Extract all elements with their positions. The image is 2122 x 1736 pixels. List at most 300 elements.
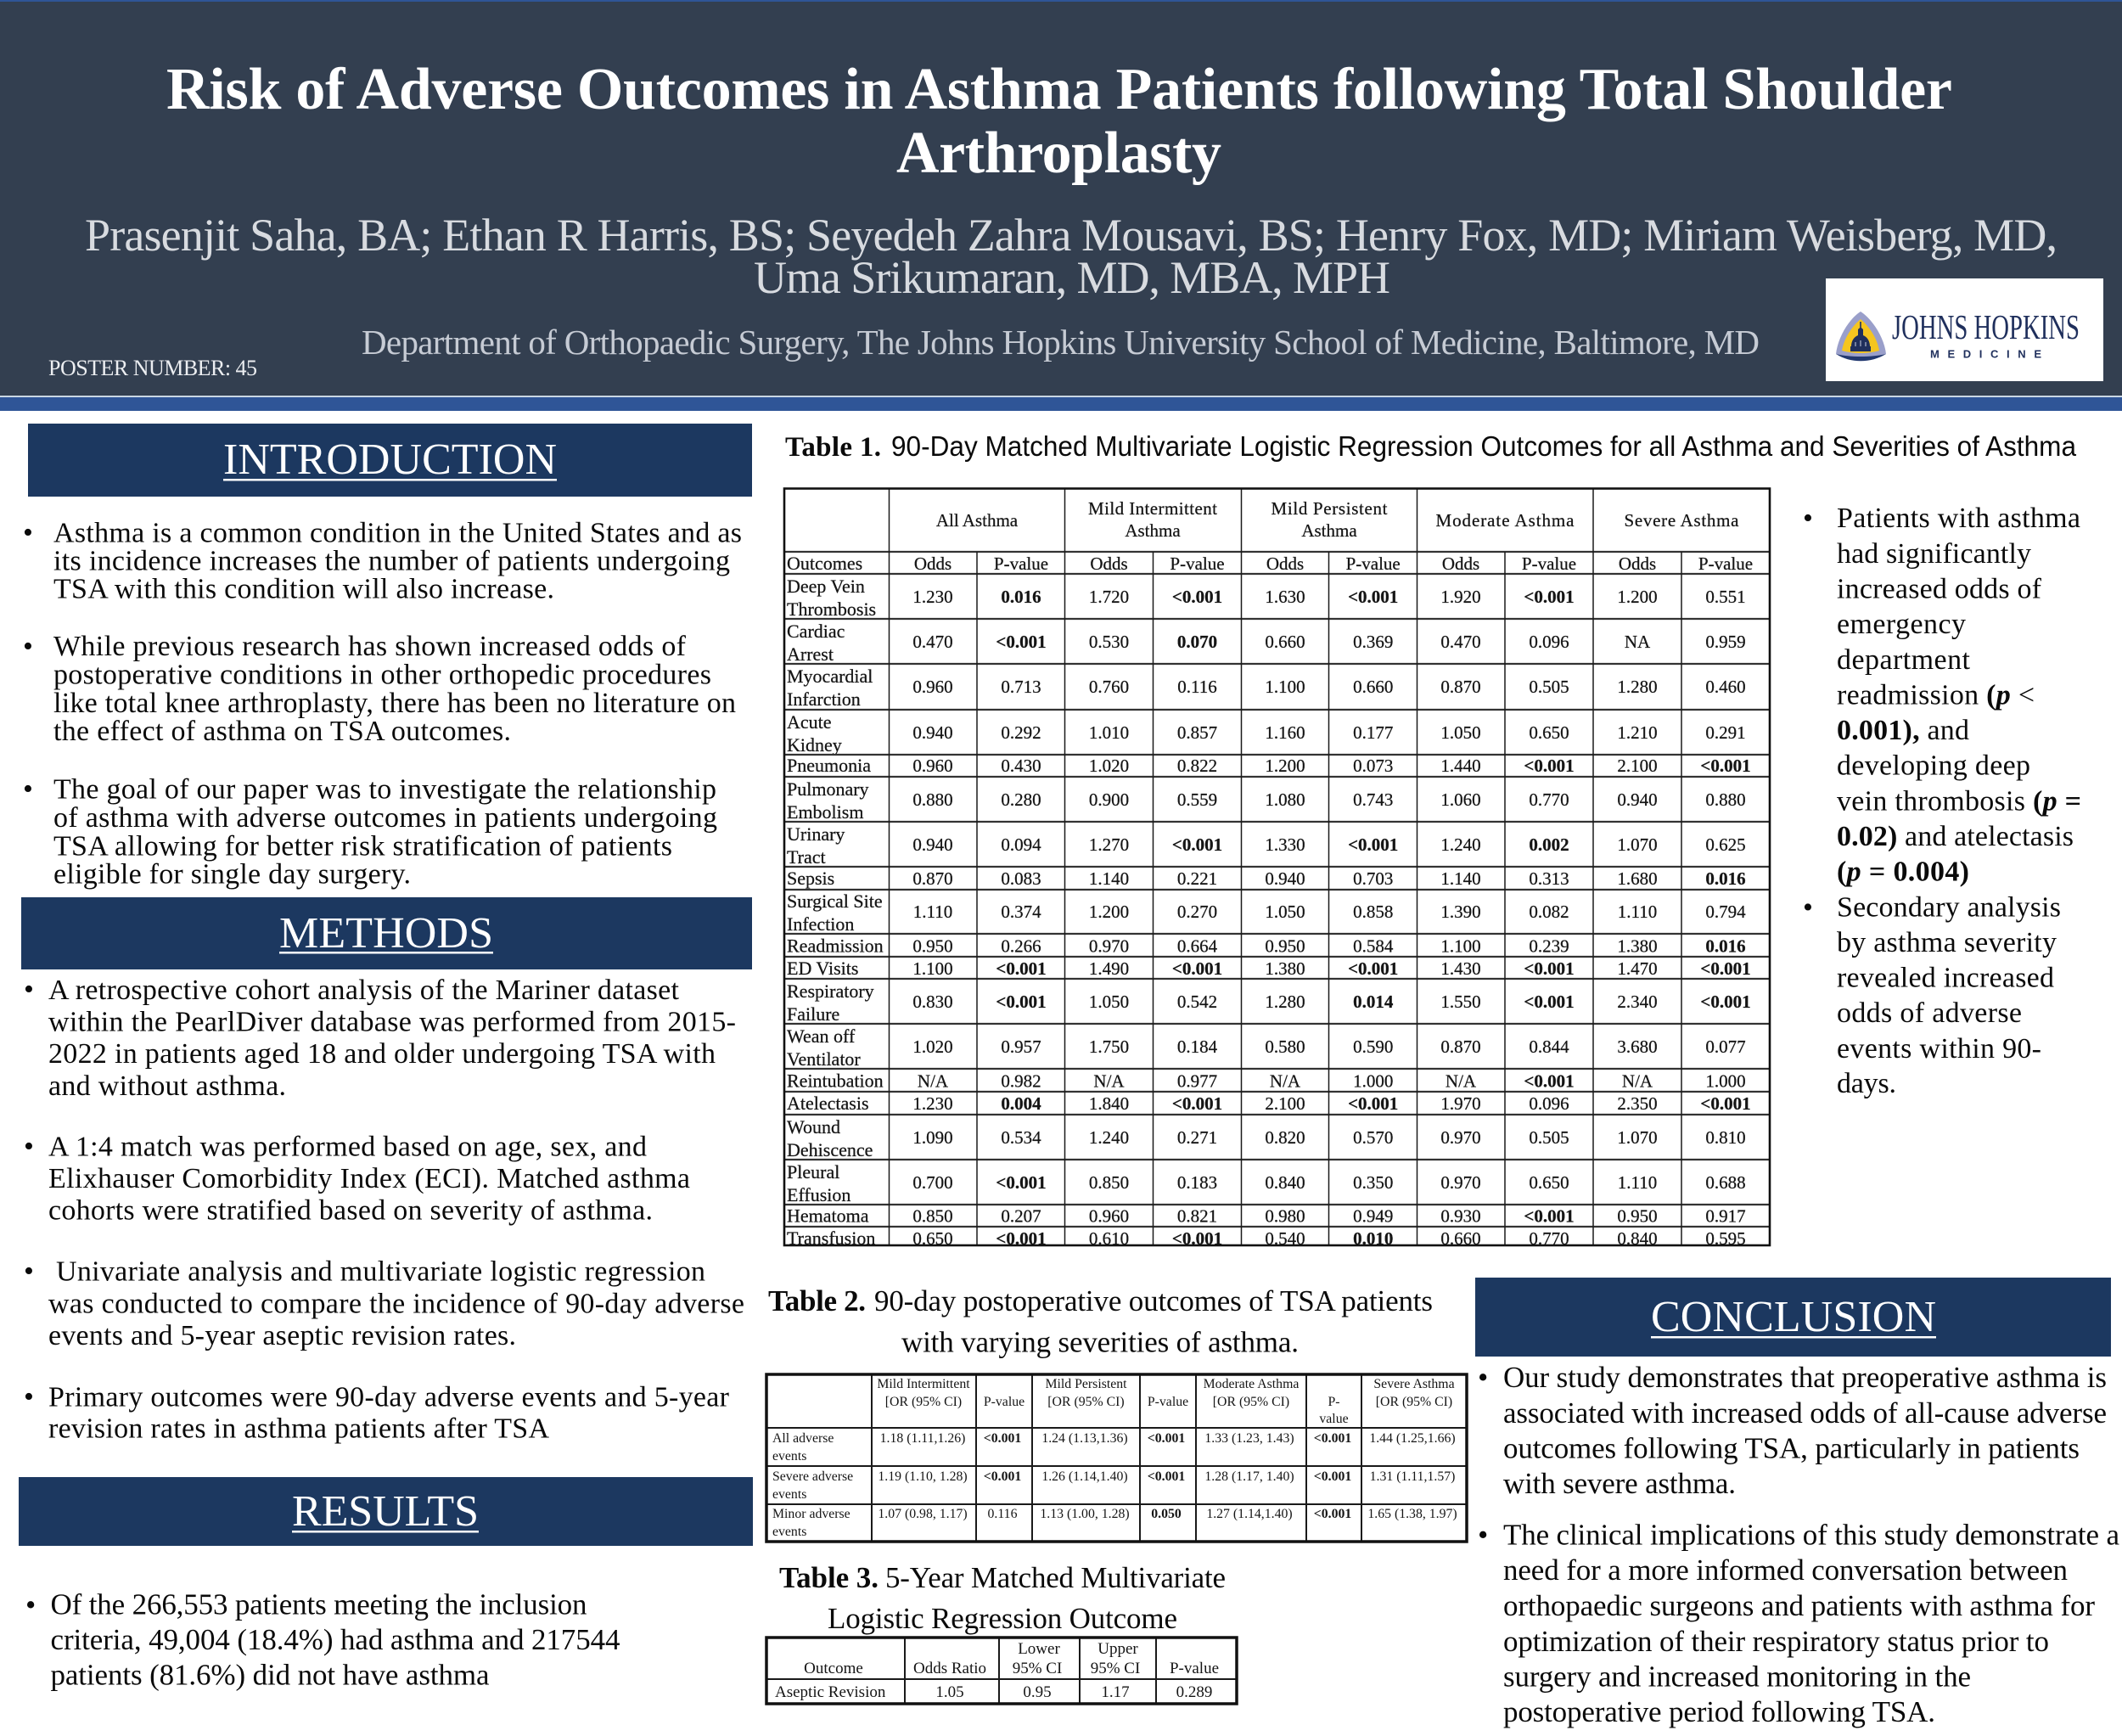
row: ed visits: <0.001 bbox=[1524, 958, 1575, 979]
row: wean off ventilator: 0.844 bbox=[1529, 1037, 1569, 1057]
text: introduction bullets: the effect of asthma on TSA outcomes. bbox=[53, 716, 511, 747]
authors: Prasenjit Saha, BA; Ethan R Harris, BS; Seyedeh Zahra Mousavi, BS; Henry Fox, MD; Miriam Weisberg, MD, bbox=[85, 210, 2057, 261]
table 3 header bbox=[804, 1640, 1219, 1677]
row: surgical site infection: 0.082 bbox=[1529, 902, 1569, 922]
row: minor adverse events: 1.27 (1.14,1.40) bbox=[1206, 1507, 1293, 1521]
row: acute kidney: 0.940 bbox=[912, 722, 953, 743]
table 2 header: P-value bbox=[1148, 1395, 1188, 1409]
panel: results bbox=[19, 1477, 753, 1691]
text: methods bullets: • bbox=[24, 1131, 34, 1162]
row: cardiac arrest: 0.959 bbox=[1705, 632, 1746, 652]
row: pleural effusion: 0.650 bbox=[1529, 1172, 1569, 1193]
row: wean off ventilator: 0.077 bbox=[1705, 1037, 1746, 1057]
row: urinary tract: 1.070 bbox=[1617, 834, 1658, 855]
row: readmission: 0.950 bbox=[1265, 935, 1305, 956]
row: wound dehiscence: 0.810 bbox=[1705, 1127, 1746, 1148]
table 1 header row: Severe Asthma bbox=[1625, 510, 1739, 531]
row: urinary tract: 0.094 bbox=[1001, 834, 1041, 855]
row: wound dehiscence: Dehiscence bbox=[787, 1139, 873, 1160]
row: urinary tract: 0.002 bbox=[1529, 834, 1569, 855]
poster number: POSTER NUMBER: 45 bbox=[48, 356, 257, 380]
row: sepsis: 0.083 bbox=[1001, 868, 1041, 889]
table 1 header row: Mild Intermittent bbox=[1088, 498, 1217, 519]
row: pulmonary embolism bbox=[787, 778, 1746, 823]
row: pleural effusion: 0.850 bbox=[1089, 1172, 1129, 1193]
table 1 header row: Mild Persistent bbox=[1272, 498, 1388, 519]
row: minor adverse events: events bbox=[772, 1525, 806, 1539]
table 1 sub-header row bbox=[787, 553, 1753, 574]
row: severe adverse events: 1.31 (1.11,1.57) bbox=[1370, 1469, 1455, 1484]
text: methods bullets bbox=[24, 974, 744, 1445]
row: wean off ventilator: 1.750 bbox=[1089, 1037, 1129, 1057]
row: hematoma: 0.850 bbox=[912, 1205, 953, 1226]
table 1 sub-header row: Odds bbox=[1090, 553, 1128, 574]
row: myocardial infarction: 0.505 bbox=[1529, 677, 1569, 697]
table 2 caption bbox=[768, 1284, 1433, 1358]
text: conclusion bullets: postoperative period following TSA. bbox=[1503, 1695, 1935, 1728]
text: table 1 findings: odds of adverse bbox=[1837, 997, 2022, 1029]
heading: methods: METHODS bbox=[279, 909, 493, 958]
row: wound dehiscence bbox=[787, 1116, 1746, 1160]
table 1 sub-header row: P-value bbox=[994, 553, 1048, 574]
row: readmission: 0.664 bbox=[1177, 935, 1218, 956]
row: myocardial infarction: 0.116 bbox=[1177, 677, 1217, 697]
row: pulmonary embolism: 0.880 bbox=[1705, 789, 1746, 810]
table 2 header: P-value bbox=[984, 1395, 1025, 1409]
row: myocardial infarction: 0.760 bbox=[1089, 677, 1129, 697]
row: hematoma: 0.980 bbox=[1265, 1205, 1305, 1226]
row: reintubation: N/A bbox=[1270, 1071, 1301, 1092]
row: ed visits: 1.490 bbox=[1089, 958, 1129, 979]
table 3 header: P-value bbox=[1170, 1660, 1219, 1677]
row: minor adverse events: 0.116 bbox=[988, 1507, 1018, 1521]
heading: conclusion bbox=[1475, 1278, 2111, 1357]
text: results bullet bbox=[25, 1588, 620, 1691]
text: introduction bullets: • bbox=[23, 631, 33, 662]
table 1 sub-header row: P-value bbox=[1170, 553, 1225, 574]
row: wound dehiscence: 0.534 bbox=[1001, 1127, 1041, 1148]
text: methods bullets: A 1:4 match was performed based on age, sex, and bbox=[48, 1131, 647, 1163]
row: acute kidney: 1.050 bbox=[1440, 722, 1481, 743]
text: introduction bullets: its incidence increases the number of patients undergoing bbox=[53, 545, 730, 577]
row: acute kidney: 0.291 bbox=[1705, 722, 1746, 743]
row: urinary tract: 0.940 bbox=[912, 834, 953, 855]
text: table 1 findings: emergency bbox=[1837, 609, 1966, 640]
row: readmission: 0.584 bbox=[1353, 935, 1394, 956]
row: pulmonary embolism: 0.900 bbox=[1089, 789, 1129, 810]
text: table 1 findings: • bbox=[1803, 503, 1813, 534]
row: pleural effusion: 0.700 bbox=[912, 1172, 953, 1193]
row: minor adverse events: 1.13 (1.00, 1.28) bbox=[1040, 1507, 1130, 1521]
row: cardiac arrest: 0.369 bbox=[1353, 632, 1393, 652]
table 1 sub-header row: Outcomes bbox=[787, 553, 862, 574]
row: readmission: 0.970 bbox=[1089, 935, 1129, 956]
row: all adverse events: 1.44 (1.25,1.66) bbox=[1369, 1431, 1456, 1446]
row: surgical site infection: Infection bbox=[787, 913, 854, 935]
row: pulmonary embolism: 1.080 bbox=[1265, 789, 1305, 810]
row: pleural effusion: 0.183 bbox=[1177, 1172, 1217, 1193]
text: table 1 findings: Secondary analysis bbox=[1837, 892, 2061, 924]
heading: methods bbox=[21, 897, 752, 969]
row: transfusion: <0.001 bbox=[1172, 1228, 1222, 1249]
row: ed visits: <0.001 bbox=[996, 958, 1047, 979]
row: reintubation: N/A bbox=[1446, 1071, 1477, 1092]
text: methods bullets: • bbox=[24, 974, 34, 1005]
row: pulmonary embolism: 0.880 bbox=[912, 789, 953, 810]
row: atelectasis: 1.230 bbox=[912, 1093, 953, 1114]
table 1 header row: Asthma bbox=[1125, 520, 1181, 541]
table 2 header: [OR (95% CI) bbox=[1376, 1395, 1452, 1409]
row: wound dehiscence: 1.090 bbox=[912, 1127, 953, 1148]
row: minor adverse events: 1.65 (1.38, 1.97) bbox=[1367, 1507, 1457, 1521]
text: conclusion bullets: optimization of their respiratory status prior to bbox=[1503, 1625, 2049, 1658]
row: sepsis: 0.940 bbox=[1265, 868, 1305, 889]
row: urinary tract: Urinary bbox=[787, 823, 845, 845]
table 2 caption: with varying severities of asthma. bbox=[901, 1326, 1299, 1358]
row: urinary tract: <0.001 bbox=[1172, 834, 1222, 855]
row: sepsis: 0.016 bbox=[1705, 868, 1746, 889]
row: pleural effusion bbox=[787, 1161, 1746, 1205]
row: myocardial infarction: 0.960 bbox=[912, 677, 953, 697]
row: atelectasis: 2.100 bbox=[1265, 1093, 1305, 1114]
row: myocardial infarction bbox=[787, 666, 1746, 710]
table 1: 90-day regression outcomes bbox=[781, 488, 1774, 1252]
row: hematoma bbox=[787, 1205, 1746, 1226]
row: transfusion: 0.840 bbox=[1617, 1228, 1658, 1249]
row: ed visits: 1.470 bbox=[1617, 958, 1658, 979]
row: ed visits: 1.380 bbox=[1265, 958, 1305, 979]
table 1 sub-header row: Odds bbox=[1266, 553, 1304, 574]
row: transfusion: 0.540 bbox=[1265, 1228, 1305, 1249]
table 3 header: Odds Ratio bbox=[913, 1660, 986, 1677]
row: pulmonary embolism: 1.060 bbox=[1440, 789, 1481, 810]
row: pulmonary embolism: 0.559 bbox=[1177, 789, 1217, 810]
row: respiratory failure: 0.014 bbox=[1353, 992, 1394, 1012]
table 3 caption: Logistic Regression Outcome bbox=[828, 1602, 1177, 1635]
row: deep vein thrombosis: 1.230 bbox=[912, 587, 953, 607]
row: deep vein thrombosis: <0.001 bbox=[1172, 587, 1222, 607]
row: acute kidney: 1.210 bbox=[1617, 722, 1658, 743]
row: reintubation: N/A bbox=[918, 1071, 949, 1092]
text: introduction bullets: like total knee arthroplasty, there has been no literature on bbox=[53, 688, 736, 719]
row: readmission: 1.380 bbox=[1617, 935, 1658, 956]
row: severe adverse events: Severe adverse bbox=[772, 1469, 853, 1484]
table 2 header: Moderate Asthma bbox=[1204, 1377, 1299, 1391]
row: cardiac arrest: Cardiac bbox=[787, 621, 845, 642]
row: myocardial infarction: 0.713 bbox=[1001, 677, 1041, 697]
row: pneumonia: <0.001 bbox=[1524, 756, 1575, 776]
table 2 header: Severe Asthma bbox=[1373, 1377, 1455, 1391]
row: surgical site infection: 1.050 bbox=[1265, 902, 1305, 922]
row: hematoma: 0.917 bbox=[1705, 1205, 1746, 1226]
text: results bullet: patients (81.6%) did not have asthma bbox=[51, 1658, 490, 1691]
text: conclusion bullets: with severe asthma. bbox=[1503, 1467, 1736, 1500]
row: readmission bbox=[787, 935, 1746, 956]
table 2 header: P- bbox=[1328, 1395, 1340, 1409]
row: readmission: 1.100 bbox=[1440, 935, 1481, 956]
text: methods bullets: cohorts were stratified based on severity of asthma. bbox=[48, 1195, 653, 1227]
row: sepsis: 0.313 bbox=[1529, 868, 1569, 889]
text: methods bullets: 2022 in patients aged 18 and older undergoing TSA with bbox=[48, 1038, 716, 1070]
row: ed visits: ED Visits bbox=[787, 958, 858, 979]
row: acute kidney: 0.650 bbox=[1529, 722, 1569, 743]
row: respiratory failure: 1.280 bbox=[1265, 992, 1305, 1012]
row: cardiac arrest: 0.470 bbox=[1440, 632, 1481, 652]
row: ed visits: <0.001 bbox=[1700, 958, 1751, 979]
logo: Johns Hopkins Medicine bbox=[1826, 278, 2103, 381]
row: deep vein thrombosis: <0.001 bbox=[1348, 587, 1398, 607]
row: respiratory failure bbox=[787, 980, 1751, 1025]
affiliation: Department of Orthopaedic Surgery, The Johns Hopkins University School of Medicine, Baltimore, MD bbox=[362, 323, 1760, 362]
row: transfusion: Transfusion bbox=[787, 1228, 875, 1249]
title: Arthroplasty bbox=[896, 121, 1221, 186]
row: acute kidney: 0.857 bbox=[1177, 722, 1217, 743]
row: transfusion: 0.610 bbox=[1089, 1228, 1129, 1249]
row: pleural effusion: 0.350 bbox=[1353, 1172, 1393, 1193]
row: cardiac arrest: NA bbox=[1625, 632, 1651, 652]
row: myocardial infarction: 1.100 bbox=[1265, 677, 1305, 697]
row: cardiac arrest: 0.096 bbox=[1529, 632, 1569, 652]
text: conclusion bullets: need for a more informed conversation between bbox=[1503, 1553, 2068, 1587]
text: introduction bullets: • bbox=[23, 517, 33, 548]
row: wean off ventilator: 0.184 bbox=[1177, 1037, 1218, 1057]
text: conclusion bullets: • bbox=[1478, 1361, 1488, 1394]
row: sepsis: Sepsis bbox=[787, 868, 834, 889]
row: myocardial infarction: 0.460 bbox=[1705, 677, 1746, 697]
row: acute kidney: 0.177 bbox=[1353, 722, 1393, 743]
row: all adverse events: events bbox=[772, 1449, 806, 1464]
row: wound dehiscence: 0.570 bbox=[1353, 1127, 1393, 1148]
text: table 1 findings: 0.001), and bbox=[1837, 715, 1969, 746]
table 1 sub-header row: Odds bbox=[914, 553, 952, 574]
table 1 caption: 90-Day Matched Multivariate Logistic Regression Outcomes for all Asthma and Severities of Asthma bbox=[891, 430, 2077, 462]
row: minor adverse events: 0.050 bbox=[1151, 1507, 1182, 1521]
text: table 1 findings: by asthma severity bbox=[1837, 927, 2057, 958]
table 2 caption: Table 2. bbox=[768, 1284, 866, 1317]
text: conclusion bullets bbox=[1478, 1361, 2119, 1728]
row: ed visits: <0.001 bbox=[1348, 958, 1398, 979]
row: pulmonary embolism: 0.280 bbox=[1001, 789, 1041, 810]
row: wean off ventilator: 0.590 bbox=[1353, 1037, 1393, 1057]
row: atelectasis: <0.001 bbox=[1172, 1093, 1222, 1114]
row: urinary tract bbox=[787, 823, 1746, 868]
table 2 header: value bbox=[1319, 1412, 1349, 1426]
text: introduction bullets: • bbox=[23, 773, 33, 805]
row: deep vein thrombosis: Thrombosis bbox=[787, 598, 876, 620]
text: results bullet: criteria, 49,004 (18.4%) had asthma and 217544 bbox=[51, 1623, 620, 1656]
row: acute kidney: Acute bbox=[787, 711, 832, 733]
row: readmission: 0.016 bbox=[1705, 935, 1746, 956]
row: wean off ventilator: 1.020 bbox=[912, 1037, 953, 1057]
row: hematoma: Hematoma bbox=[787, 1205, 869, 1226]
row: wean off ventilator: Ventilator bbox=[787, 1048, 861, 1070]
table 1 header row: All Asthma bbox=[936, 510, 1019, 531]
row: all adverse events: 1.33 (1.23, 1.43) bbox=[1204, 1431, 1294, 1446]
row: wound dehiscence: 0.505 bbox=[1529, 1127, 1569, 1148]
row: cardiac arrest bbox=[787, 621, 1746, 665]
row: readmission: 0.239 bbox=[1529, 935, 1569, 956]
table 2 header: Mild Intermittent bbox=[877, 1377, 970, 1391]
table 1 header row: Asthma bbox=[1301, 520, 1357, 541]
row: wean off ventilator: Wean off bbox=[787, 1025, 856, 1047]
row: all adverse events: 1.24 (1.13,1.36) bbox=[1041, 1431, 1128, 1446]
text: introduction bullets: eligible for single day surgery. bbox=[53, 859, 411, 890]
row: atelectasis bbox=[787, 1093, 1751, 1114]
text: conclusion bullets: Our study demonstrates that preoperative asthma is bbox=[1503, 1361, 2107, 1394]
row: atelectasis: 2.350 bbox=[1617, 1093, 1658, 1114]
row: pneumonia: 1.200 bbox=[1265, 756, 1305, 776]
row: ed visits: <0.001 bbox=[1172, 958, 1222, 979]
row: atelectasis: 1.970 bbox=[1440, 1093, 1481, 1114]
row: minor adverse events bbox=[772, 1507, 1457, 1539]
row: surgical site infection: 1.110 bbox=[1618, 902, 1657, 922]
row: respiratory failure: Respiratory bbox=[787, 980, 874, 1002]
row: pneumonia: 0.430 bbox=[1001, 756, 1041, 776]
table 3 header: Outcome bbox=[804, 1660, 863, 1677]
row: atelectasis: 0.096 bbox=[1529, 1093, 1569, 1114]
row: acute kidney: 0.292 bbox=[1001, 722, 1041, 743]
row: surgical site infection: Surgical Site bbox=[787, 890, 883, 912]
text: methods bullets: Elixhauser Comorbidity Index (ECI). Matched asthma bbox=[48, 1163, 690, 1194]
text: conclusion bullets: orthopaedic surgeons and patients with asthma for bbox=[1503, 1589, 2095, 1622]
row: ed visits: 1.430 bbox=[1440, 958, 1481, 979]
table 1 caption: Table 1. bbox=[785, 432, 881, 463]
text: table 1 findings: developing deep bbox=[1837, 750, 2030, 782]
row: pleural effusion: 0.688 bbox=[1705, 1172, 1746, 1193]
text: table 1 findings: 0.02) and atelectasis bbox=[1837, 821, 2074, 852]
row: myocardial infarction: 1.280 bbox=[1617, 677, 1658, 697]
row: pleural effusion: Effusion bbox=[787, 1184, 850, 1205]
header banner bbox=[0, 0, 2122, 411]
text: introduction bullets: postoperative conditions in other orthopedic procedures bbox=[53, 659, 711, 691]
row: respiratory failure: Failure bbox=[787, 1003, 839, 1025]
row: hematoma: 0.950 bbox=[1617, 1205, 1658, 1226]
row: pulmonary embolism: 0.940 bbox=[1617, 789, 1658, 810]
text: conclusion bullets: associated with increased odds of all-cause adverse bbox=[1503, 1396, 2107, 1430]
table 3 header: Upper bbox=[1097, 1640, 1138, 1658]
row: atelectasis: Atelectasis bbox=[787, 1093, 869, 1114]
row: wean off ventilator: 3.680 bbox=[1617, 1037, 1658, 1057]
row: aseptic revision: 1.05 bbox=[935, 1683, 964, 1701]
table 2 header: Mild Persistent bbox=[1045, 1377, 1127, 1391]
row: atelectasis: <0.001 bbox=[1348, 1093, 1398, 1114]
table 2 header: [OR (95% CI) bbox=[1213, 1395, 1289, 1409]
row: cardiac arrest: 0.660 bbox=[1265, 632, 1305, 652]
row: wean off ventilator: 0.870 bbox=[1440, 1037, 1481, 1057]
row: surgical site infection: 0.270 bbox=[1177, 902, 1217, 922]
row: cardiac arrest: 0.470 bbox=[912, 632, 953, 652]
row: wean off ventilator: 0.957 bbox=[1001, 1037, 1041, 1057]
heading: introduction bbox=[28, 424, 752, 497]
row: wound dehiscence: 0.820 bbox=[1265, 1127, 1305, 1148]
text: results bullet: Of the 266,553 patients meeting the inclusion bbox=[51, 1588, 587, 1621]
row: sepsis: 0.870 bbox=[912, 868, 953, 889]
row: pleural effusion: Pleural bbox=[787, 1161, 839, 1183]
row: severe adverse events: 1.26 (1.14,1.40) bbox=[1041, 1469, 1128, 1484]
row: surgical site infection bbox=[787, 890, 1746, 935]
row: sepsis bbox=[787, 868, 1746, 889]
row: all adverse events: 1.18 (1.11,1.26) bbox=[880, 1431, 965, 1446]
row: acute kidney bbox=[787, 711, 1746, 756]
row: pneumonia bbox=[787, 755, 1751, 776]
row: transfusion: 0.010 bbox=[1353, 1228, 1393, 1249]
row: minor adverse events: Minor adverse bbox=[772, 1507, 850, 1521]
row: surgical site infection: 0.794 bbox=[1705, 902, 1746, 922]
text: methods bullets: and without asthma. bbox=[48, 1070, 286, 1102]
row: surgical site infection: 1.390 bbox=[1440, 902, 1481, 922]
row: pneumonia: Pneumonia bbox=[787, 755, 871, 776]
table 3 header: 95% CI bbox=[1091, 1660, 1140, 1677]
table 1 sub-header row: P-value bbox=[1698, 553, 1753, 574]
row: severe adverse events: 1.28 (1.17, 1.40) bbox=[1204, 1469, 1294, 1484]
text: methods bullets: revision rates in asthma patients after TSA bbox=[48, 1413, 549, 1445]
text: introduction bullets bbox=[23, 517, 742, 890]
text: introduction bullets: of asthma with adverse outcomes in patients undergoing bbox=[53, 802, 717, 834]
text: table 1 findings: days. bbox=[1837, 1068, 1896, 1099]
row: severe adverse events: 1.19 (1.10, 1.28) bbox=[878, 1469, 968, 1484]
table 2 header: [OR (95% CI) bbox=[885, 1395, 962, 1409]
text: table 1 findings: events within 90- bbox=[1837, 1033, 2041, 1065]
row: deep vein thrombosis: 1.200 bbox=[1617, 587, 1658, 607]
table 1 header row bbox=[936, 498, 1739, 541]
row: pulmonary embolism: Embolism bbox=[787, 801, 863, 823]
row: acute kidney: 1.010 bbox=[1089, 722, 1129, 743]
row: all adverse events: <0.001 bbox=[1314, 1431, 1351, 1446]
text: table 1 findings: readmission (p < bbox=[1837, 680, 2035, 711]
row: sepsis: 1.140 bbox=[1089, 868, 1129, 889]
row: hematoma: 0.949 bbox=[1353, 1205, 1393, 1226]
row: hematoma: 0.930 bbox=[1440, 1205, 1481, 1226]
row: pleural effusion: 0.970 bbox=[1440, 1172, 1481, 1193]
heading: conclusion: CONCLUSION bbox=[1651, 1293, 1936, 1341]
row: hematoma: 0.821 bbox=[1177, 1205, 1217, 1226]
row: urinary tract: 0.625 bbox=[1705, 834, 1746, 855]
row: urinary tract: 1.330 bbox=[1265, 834, 1305, 855]
row: pleural effusion: 0.840 bbox=[1265, 1172, 1305, 1193]
row: deep vein thrombosis bbox=[787, 576, 1746, 620]
row: pulmonary embolism: Pulmonary bbox=[787, 778, 869, 800]
row: pneumonia: 1.020 bbox=[1089, 756, 1129, 776]
row: sepsis: 0.221 bbox=[1177, 868, 1217, 889]
row: deep vein thrombosis: 1.920 bbox=[1440, 587, 1481, 607]
row: atelectasis: 1.840 bbox=[1089, 1093, 1129, 1114]
title bbox=[166, 57, 1952, 186]
text: methods bullets: was conducted to compare the incidence of 90-day adverse bbox=[48, 1288, 744, 1319]
row: deep vein thrombosis: 1.630 bbox=[1265, 587, 1305, 607]
row: readmission: 0.266 bbox=[1001, 935, 1041, 956]
text: table 1 findings: had significantly bbox=[1837, 538, 2031, 570]
table 1 sub-header row: Odds bbox=[1619, 553, 1656, 574]
row: surgical site infection: 1.200 bbox=[1089, 902, 1129, 922]
text: table 1 findings bbox=[1803, 503, 2081, 1099]
table 3 caption bbox=[779, 1561, 1226, 1635]
row: readmission: 0.950 bbox=[912, 935, 953, 956]
row: sepsis: 1.680 bbox=[1617, 868, 1658, 889]
text: table 1 findings: department bbox=[1837, 644, 1971, 676]
row: surgical site infection: 0.374 bbox=[1001, 902, 1041, 922]
text: introduction bullets: TSA allowing for better risk stratification of patients bbox=[53, 830, 672, 862]
row: reintubation: 1.000 bbox=[1353, 1071, 1393, 1092]
table 3 caption: Table 3. bbox=[779, 1561, 879, 1594]
row: wound dehiscence: 0.970 bbox=[1440, 1127, 1481, 1148]
row: hematoma: <0.001 bbox=[1524, 1205, 1575, 1226]
heading: results bbox=[19, 1477, 753, 1546]
text: introduction bullets: While previous research has shown increased odds of bbox=[53, 631, 687, 662]
row: acute kidney: 1.160 bbox=[1265, 722, 1305, 743]
row: respiratory failure: 1.050 bbox=[1089, 992, 1129, 1012]
row: wound dehiscence: 1.070 bbox=[1617, 1127, 1658, 1148]
text: table 1 findings: Patients with asthma bbox=[1837, 503, 2080, 534]
